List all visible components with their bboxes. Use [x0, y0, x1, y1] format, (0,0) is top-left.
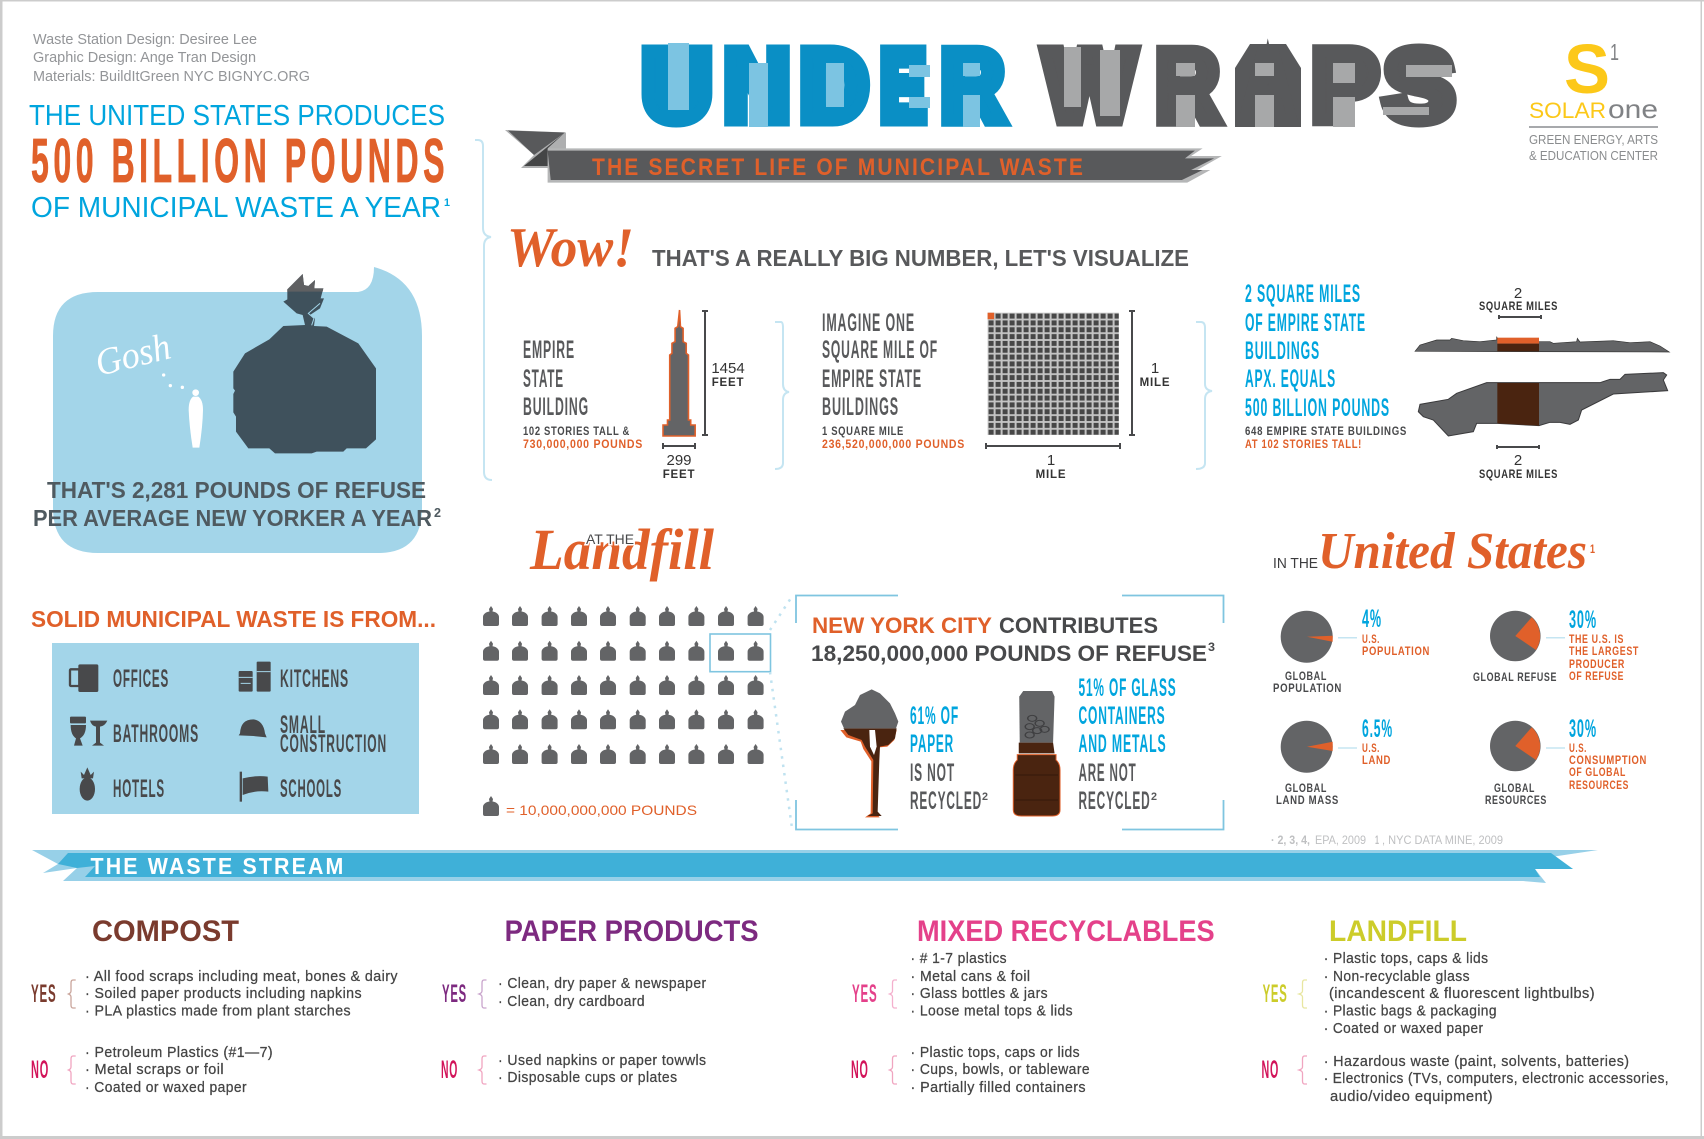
icon: flag	[240, 772, 268, 802]
dimension: height: FEET	[712, 377, 744, 389]
heading: solid municipal waste sources: SOLID MUNICIPAL WASTE IS FROM...	[31, 606, 436, 632]
paper stat: 61% OF	[910, 702, 959, 730]
recyclables yes list	[852, 951, 1073, 1020]
two square miles label	[1245, 280, 1407, 451]
heading: Wow, let's visualize: Wow!	[507, 217, 634, 279]
dimension: width: 299	[666, 452, 692, 469]
footnote sources: · 2, 3, 4,	[1271, 833, 1310, 847]
panel: two square miles	[1245, 280, 1669, 481]
square mile label: 1 SQUARE MILE	[822, 426, 904, 438]
glass stat: RECYCLED	[1078, 787, 1150, 815]
panel: mixed recyclables	[851, 915, 1215, 1096]
title: Under Wraps: N	[724, 30, 790, 142]
refuse caption: 2	[434, 505, 441, 520]
paper stat: PAPER	[910, 730, 954, 758]
headline: 500 billion pounds: OF MUNICIPAL WASTE A YEAR	[31, 192, 441, 224]
square mile label: EMPIRE STATE	[822, 365, 922, 393]
dimension: height: 1454	[711, 360, 745, 377]
landfill yes list: · Coated or waxed paper	[1324, 1021, 1484, 1037]
chart: global resources pie: CONSUMPTION	[1569, 755, 1647, 767]
panel: waste sources	[52, 643, 419, 814]
two square miles label: 648 EMPIRE STATE BUILDINGS	[1245, 426, 1407, 438]
glass stat: 2	[1151, 791, 1157, 803]
paper stat: RECYCLED	[910, 787, 982, 815]
panel: paper products: PAPER PRODUCTS	[505, 915, 759, 948]
ribbon fold	[505, 130, 566, 168]
chart: global resources pie: U.S.	[1569, 743, 1587, 755]
dimension: width	[663, 443, 695, 481]
Empire State label: 102 STORIES TALL &	[523, 426, 630, 438]
credits text block	[33, 31, 310, 85]
bottom dimension: 2	[1514, 452, 1522, 469]
landfill no list	[1262, 1054, 1669, 1105]
chart: global refuse pie: GLOBAL REFUSE	[1473, 672, 1557, 684]
chart: global resources pie: RESOURCES	[1569, 780, 1629, 792]
paper yes list: · Clean, dry cardboard	[498, 994, 645, 1010]
glass stat: ARE NOT	[1078, 759, 1136, 787]
compost no list: · Petroleum Plastics (#1—7)	[85, 1045, 273, 1061]
recyclables yes list: · Metal cans & foil	[910, 969, 1030, 985]
callout heading: 3	[1208, 640, 1215, 654]
compost no list: · Coated or waxed paper	[85, 1080, 247, 1096]
recyclables no list: · Plastic tops, caps or lids	[910, 1045, 1080, 1061]
paper no list: NO	[441, 1056, 458, 1084]
brace: headline to visualization	[475, 140, 492, 480]
chart: global land mass pie: LAND	[1362, 755, 1391, 767]
callout heading: 18,250,000,000 POUNDS OF REFUSE	[811, 641, 1207, 666]
glass stat: AND METALS	[1078, 730, 1166, 758]
logo: Solar One: SOLAR	[1529, 98, 1606, 123]
dimension: height	[702, 310, 745, 436]
title: Under Wraps: U	[642, 30, 712, 142]
dimension: one mile vertical: MILE	[1140, 377, 1170, 389]
chart: global refuse pie: PRODUCER	[1569, 659, 1625, 671]
callout heading	[811, 613, 1215, 666]
logo: Solar One: 1	[1610, 39, 1619, 65]
paper stat	[910, 702, 988, 815]
footnote sources	[1271, 833, 1503, 847]
panel: mixed recyclables: MIXED RECYCLABLES	[917, 915, 1215, 948]
icon: person	[162, 373, 203, 448]
top dimension: 2	[1514, 285, 1522, 302]
panel: waste sources: CONSTRUCTION	[280, 730, 387, 758]
chart: global resources pie: GLOBAL	[1494, 783, 1535, 795]
footnote sources: , NYC DATA MINE, 2009	[1382, 833, 1503, 847]
panel: compost	[31, 915, 398, 1096]
dimension: one mile vertical: 1	[1151, 360, 1159, 377]
title: Under Wraps: P	[1312, 30, 1378, 142]
landfill yes list: · Plastic bags & packaging	[1324, 1004, 1497, 1020]
chart: global population pie: U.S.	[1362, 634, 1380, 646]
chart: global population pie: POPULATION	[1273, 683, 1342, 695]
icon: pineapple	[80, 767, 95, 801]
chart: global population pie: 4%	[1362, 605, 1382, 633]
callout frame	[796, 596, 1224, 830]
dimension: width: FEET	[663, 469, 695, 481]
compost yes list	[31, 969, 398, 1020]
two square miles label: OF EMPIRE STATE	[1245, 309, 1366, 337]
compost no list: · Metal scraps or foil	[85, 1062, 224, 1078]
title: Under Wraps: D	[800, 30, 868, 142]
text: 6.5%	[1362, 715, 1393, 743]
headline: 500 billion pounds: THE UNITED STATES PRODUCES	[29, 100, 445, 132]
logo: Solar One: & EDUCATION CENTER	[1529, 148, 1658, 163]
two square miles label: AT 102 STORIES TALL!	[1245, 439, 1362, 451]
square mile label: SQUARE MILE OF	[822, 336, 938, 364]
paper stat: IS NOT	[910, 759, 955, 787]
dimension: one mile horizontal	[986, 443, 1120, 481]
chart: grid of buildings	[988, 313, 1119, 435]
ribbon: the waste stream: THE WASTE STREAM	[90, 853, 346, 879]
heading: Wow, let's visualize: THAT'S A REALLY BIG NUMBER, LET'S VISUALIZE	[652, 245, 1189, 271]
title: Under Wraps: S	[1384, 30, 1454, 142]
recyclables no list: · Cups, bowls, or tableware	[910, 1062, 1090, 1078]
credits text block: Materials: BuildItGreen NYC BIGNYC.ORG	[33, 68, 310, 85]
chart: global refuse pie: 30%	[1569, 606, 1597, 634]
compost yes list: · Soiled paper products including napkins	[85, 986, 362, 1002]
ribbon: the secret life of municipal waste: THE SECRET LIFE OF MUNICIPAL WASTE	[592, 154, 1085, 181]
dimension: one mile horizontal: MILE	[1036, 469, 1066, 481]
landfill no list: · Electronics (TVs, computers, electronic accessories,	[1324, 1071, 1669, 1087]
chart: global land mass pie: GLOBAL	[1285, 783, 1327, 795]
title: Under Wraps: R	[941, 30, 1004, 142]
logo: Solar One	[1529, 30, 1658, 163]
square mile label: BUILDINGS	[822, 393, 899, 421]
headline: 500 billion pounds: 1	[444, 197, 450, 209]
recyclables no list: NO	[851, 1056, 869, 1084]
compost no list: NO	[31, 1056, 49, 1084]
brace: square mile to Manhattan	[1196, 322, 1212, 469]
title: Under Wraps: W	[1044, 30, 1135, 142]
dimension: one mile vertical	[1129, 310, 1170, 436]
Empire State label: BUILDING	[523, 393, 589, 421]
headline: 500 billion pounds	[29, 100, 450, 224]
chart: pictogram of trash bags	[483, 606, 770, 764]
label: small construction	[280, 711, 387, 758]
chart: global land mass pie	[1276, 715, 1393, 807]
panel: waste sources: HOTELS	[113, 775, 165, 803]
chart: global resources pie	[1485, 715, 1647, 807]
chart: map of Manhattan	[1418, 373, 1668, 436]
refuse caption	[33, 477, 441, 531]
panel: landfill	[1262, 915, 1669, 1105]
square mile label: IMAGINE ONE	[822, 309, 915, 337]
recyclables yes list: YES	[852, 980, 878, 1008]
panel: waste sources: BATHROOMS	[113, 720, 199, 748]
icon: hard hat	[239, 719, 267, 737]
paper yes list	[442, 976, 706, 1010]
chart: global refuse pie	[1473, 606, 1639, 684]
headline: 500 billion pounds: 500 BILLION POUNDS	[31, 127, 449, 196]
chart: global land mass pie: U.S.	[1362, 743, 1380, 755]
logo: Solar One: S	[1564, 30, 1610, 108]
legend: bag value: = 10,000,000,000 POUNDS	[506, 802, 697, 818]
recyclables no list	[851, 1045, 1090, 1096]
chart: global land mass pie: LAND MASS	[1276, 795, 1339, 807]
bottom dimension: SQUARE MILES	[1479, 469, 1558, 481]
logo: Solar One: one	[1608, 94, 1658, 124]
title: Under Wraps	[642, 30, 1454, 142]
paper no list: · Disposable cups or plates	[498, 1070, 678, 1086]
heading: in the United States: United States	[1318, 523, 1587, 580]
refuse caption: THAT'S 2,281 POUNDS OF REFUSE	[47, 477, 426, 503]
paper yes list: YES	[442, 980, 467, 1008]
landfill no list: NO	[1262, 1056, 1279, 1084]
chart: global population pie: POPULATION	[1362, 646, 1430, 658]
compost yes list: · All food scraps including meat, bones & dairy	[85, 969, 398, 985]
compost yes list: YES	[31, 980, 56, 1008]
chart: global refuse pie: THE LARGEST	[1569, 646, 1639, 658]
panel: one square mile of buildings	[822, 309, 1170, 481]
Empire State label: 730,000,000 POUNDS	[523, 439, 643, 451]
chart: global refuse pie: OF REFUSE	[1569, 671, 1624, 683]
callout heading: NEW YORK CITY	[812, 613, 992, 638]
panel: landfill: LANDFILL	[1329, 915, 1467, 948]
dimension: one mile horizontal: 1	[1047, 452, 1055, 469]
heading: in the United States: IN THE	[1273, 555, 1318, 572]
credits text block: Graphic Design: Ange Tran Design	[33, 49, 256, 66]
panel: waste sources: OFFICES	[113, 665, 169, 693]
legend: bag value	[483, 796, 697, 818]
heading: at the landfill: Landfill	[529, 517, 715, 582]
title: Under Wraps: E	[880, 30, 926, 142]
chart: global resources pie: 30%	[1569, 715, 1597, 743]
glass stat	[1078, 674, 1176, 815]
refuse caption: PER AVERAGE NEW YORKER A YEAR	[33, 505, 432, 531]
landfill yes list: · Non-recyclable glass	[1324, 969, 1470, 985]
compost yes list: · PLA plastics made from plant starches	[85, 1004, 351, 1020]
Empire State label: EMPIRE	[523, 336, 575, 364]
top dimension	[1479, 285, 1558, 319]
credits text block: Waste Station Design: Desiree Lee	[33, 31, 257, 48]
two square miles label: APX. EQUALS	[1245, 365, 1336, 393]
icon: jar and can	[1013, 691, 1060, 816]
paper no list	[441, 1053, 706, 1086]
title: Under Wraps: A	[1242, 30, 1294, 142]
bottom dimension	[1479, 445, 1558, 481]
icon: toilet and sink	[70, 717, 107, 746]
panel: compost: COMPOST	[92, 915, 239, 948]
icon: Empire State Building tower	[663, 310, 695, 436]
recyclables yes list: · # 1-7 plastics	[910, 951, 1007, 967]
panel: New York City contribution	[796, 596, 1224, 830]
square mile label: 236,520,000,000 POUNDS	[822, 439, 965, 451]
heading: at the landfill: AT THE	[586, 531, 634, 547]
landfill no list: · Hazardous waste (paint, solvents, batteries)	[1324, 1054, 1630, 1070]
chart: global population pie: GLOBAL	[1285, 671, 1327, 683]
title: Under Wraps: R	[1156, 30, 1219, 142]
landfill yes list: YES	[1263, 980, 1288, 1008]
footnote sources: EPA, 2009	[1315, 833, 1366, 847]
landfill yes list: · Plastic tops, caps & lids	[1324, 951, 1488, 967]
square mile label	[822, 309, 965, 451]
label: small construction: SMALL	[280, 711, 326, 739]
heading: in the United States: 1	[1590, 542, 1595, 556]
callout connector dots	[770, 595, 793, 828]
panel: New York City contribution: 51% OF GLASS	[1078, 674, 1176, 702]
panel: waste sources: SCHOOLS	[280, 775, 342, 803]
two square miles label: BUILDINGS	[1245, 337, 1320, 365]
recyclables yes list: · Glass bottles & jars	[910, 986, 1048, 1002]
icon: garbage bag	[233, 274, 376, 453]
compost no list	[31, 1045, 273, 1096]
recyclables yes list: · Loose metal tops & lids	[910, 1004, 1073, 1020]
ribbon: the secret life of municipal waste	[505, 130, 1222, 183]
landfill yes list	[1263, 951, 1595, 1037]
speech bubble	[53, 267, 422, 553]
paper yes list: · Clean, dry paper & newspaper	[498, 976, 706, 992]
glass stat: CONTAINERS	[1078, 702, 1166, 730]
brace: building to square mile	[775, 322, 789, 469]
panel: paper products	[441, 915, 759, 1086]
logo: Solar One: GREEN ENERGY, ARTS	[1529, 132, 1658, 147]
gosh script: Gosh	[91, 326, 175, 385]
icon: tree	[840, 689, 898, 817]
Empire State label: STATE	[523, 365, 564, 393]
two square miles label: 2 SQUARE MILES	[1245, 280, 1361, 308]
chart: global resources pie: OF GLOBAL	[1569, 767, 1626, 779]
footnote sources: 1	[1375, 833, 1379, 847]
panel: waste sources: KITCHENS	[280, 665, 349, 693]
Empire State label	[523, 336, 643, 451]
paper stat: 2	[982, 791, 988, 803]
chart: skyline of Manhattan	[1415, 337, 1669, 352]
two square miles label: 500 BILLION POUNDS	[1245, 394, 1390, 422]
icon: mug	[70, 664, 98, 692]
chart: global refuse pie: THE U.S. IS	[1569, 634, 1624, 646]
panel: Empire State Building	[523, 310, 745, 481]
paper no list: · Used napkins or paper towwls	[498, 1053, 706, 1069]
panel: per New Yorker refuse	[33, 267, 441, 553]
recyclables no list: · Partially filled containers	[910, 1080, 1086, 1096]
landfill yes list: (incandescent & fluorescent lightbulbs)	[1329, 986, 1595, 1002]
top dimension: SQUARE MILES	[1479, 301, 1558, 313]
landfill no list: audio/video equipment)	[1330, 1089, 1493, 1105]
chart: global population pie	[1273, 605, 1430, 695]
heading: Wow, let's visualize	[507, 217, 1189, 279]
chart: global resources pie: RESOURCES	[1485, 795, 1547, 807]
icon: stove and fridge	[239, 662, 271, 692]
callout heading: CONTRIBUTES	[999, 613, 1158, 638]
ribbon: the waste stream	[32, 850, 1598, 883]
